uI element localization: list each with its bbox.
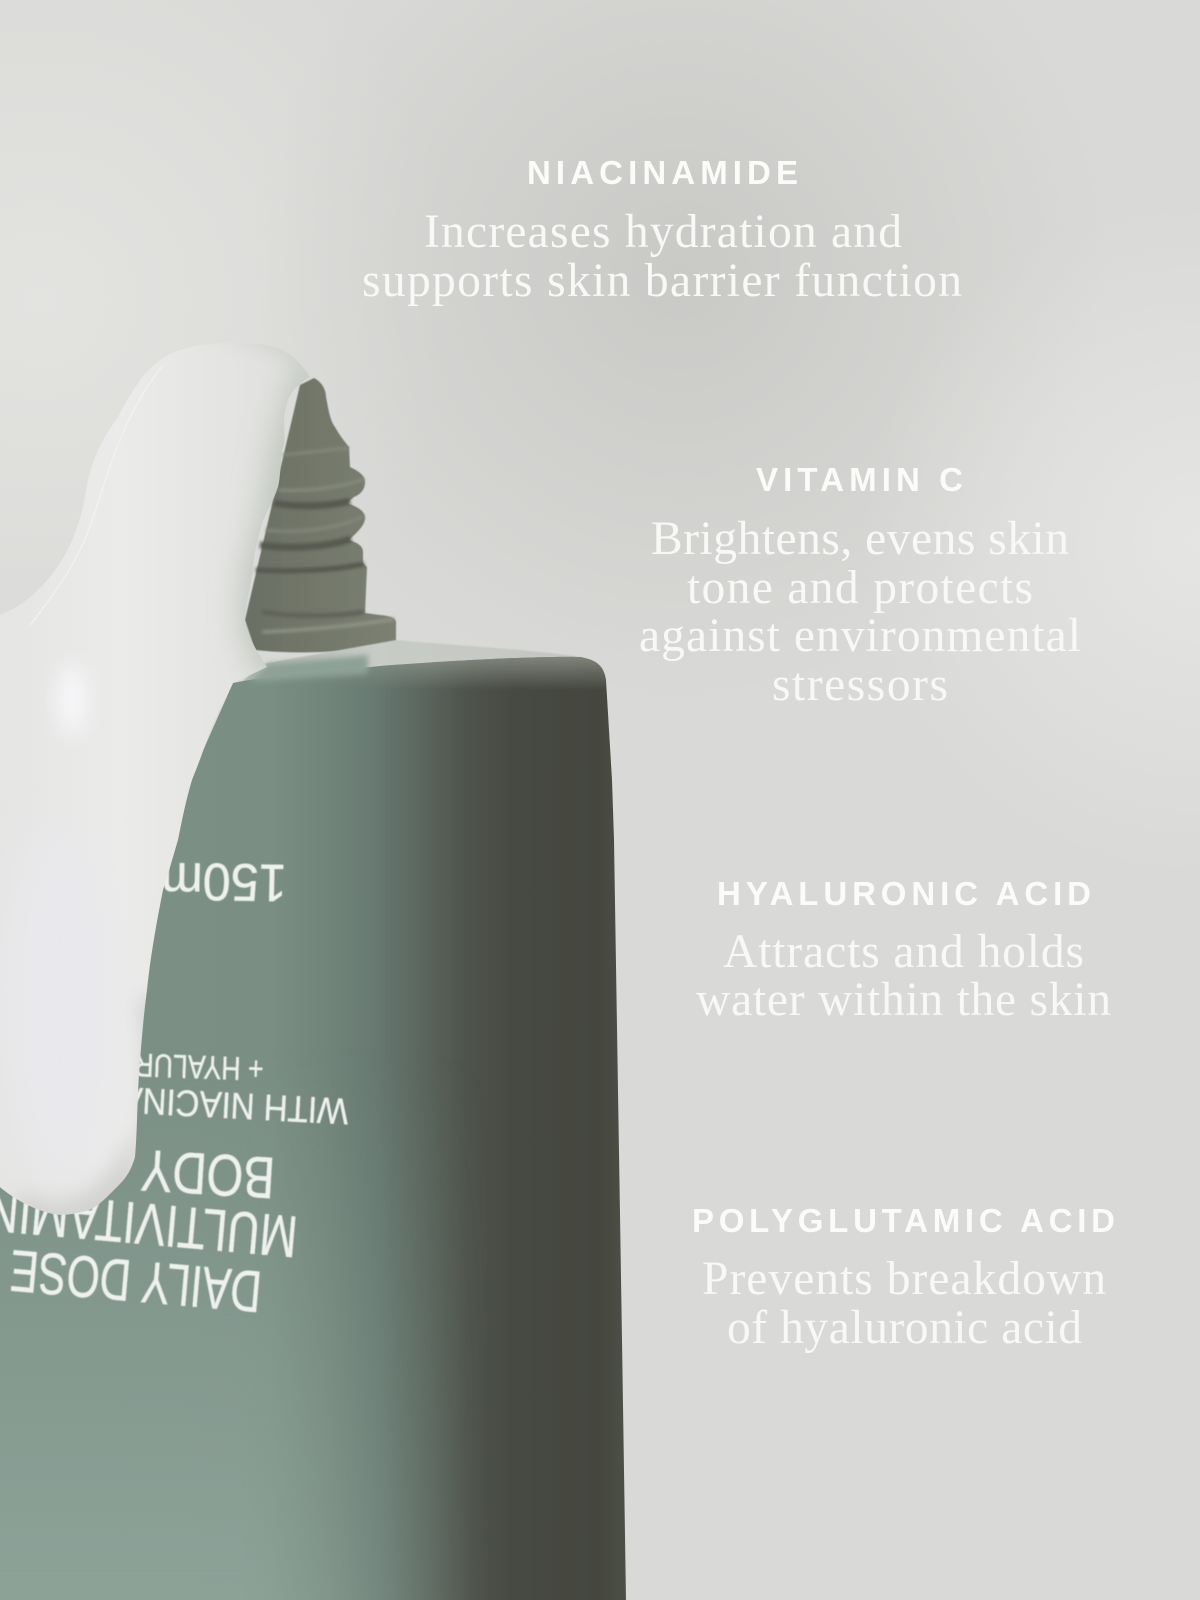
description: vitamin c: [639, 513, 1081, 711]
heading: polyglutamic acid: POLYGLUTAMIC ACID: [692, 1202, 1115, 1239]
description: vitamin c: Brightens, evens skin: [651, 513, 1069, 565]
nozzle reflection: [250, 655, 368, 682]
heading: vitamin c: VITAMIN C: [756, 461, 963, 498]
description: niacinamide: supports skin barrier function: [362, 255, 962, 307]
ingredient line: WITH NIACINAMIDE: [37, 1075, 349, 1132]
description: polyglutamic acid: [702, 1253, 1106, 1354]
tube label text: [0, 851, 349, 1325]
panel: hyaluronic acid: [696, 875, 1111, 1026]
description: vitamin c: stressors: [772, 659, 948, 711]
description: hyaluronic acid: Attracts and holds: [723, 926, 1084, 978]
heading: hyaluronic acid: HYALURONIC ACID: [717, 875, 1091, 912]
heading: niacinamide: NIACINAMIDE: [527, 154, 798, 191]
description: vitamin c: against environmental: [639, 610, 1081, 662]
white cream: [0, 330, 330, 1230]
description: niacinamide: Increases hydration and: [424, 206, 902, 258]
panel: vitamin c: [639, 461, 1081, 711]
description: polyglutamic acid: Prevents breakdown: [702, 1253, 1106, 1305]
product tube: [0, 378, 635, 1600]
volume: 150ml: [149, 851, 287, 912]
tube body: [0, 640, 635, 1600]
description: niacinamide: [362, 206, 962, 307]
nozzle: [245, 378, 396, 652]
panel: niacinamide: [362, 154, 962, 307]
tube shoulder rim: [233, 640, 606, 690]
description: hyaluronic acid: [696, 926, 1111, 1026]
description: polyglutamic acid: of hyaluronic acid: [727, 1302, 1082, 1354]
description: vitamin c: tone and protects: [687, 562, 1033, 614]
panel: polyglutamic acid: [692, 1202, 1115, 1354]
product type: BODY: [139, 1137, 277, 1211]
additive line: + HYALURONIC: [67, 1044, 264, 1088]
description: hyaluronic acid: water within the skin: [696, 974, 1111, 1026]
